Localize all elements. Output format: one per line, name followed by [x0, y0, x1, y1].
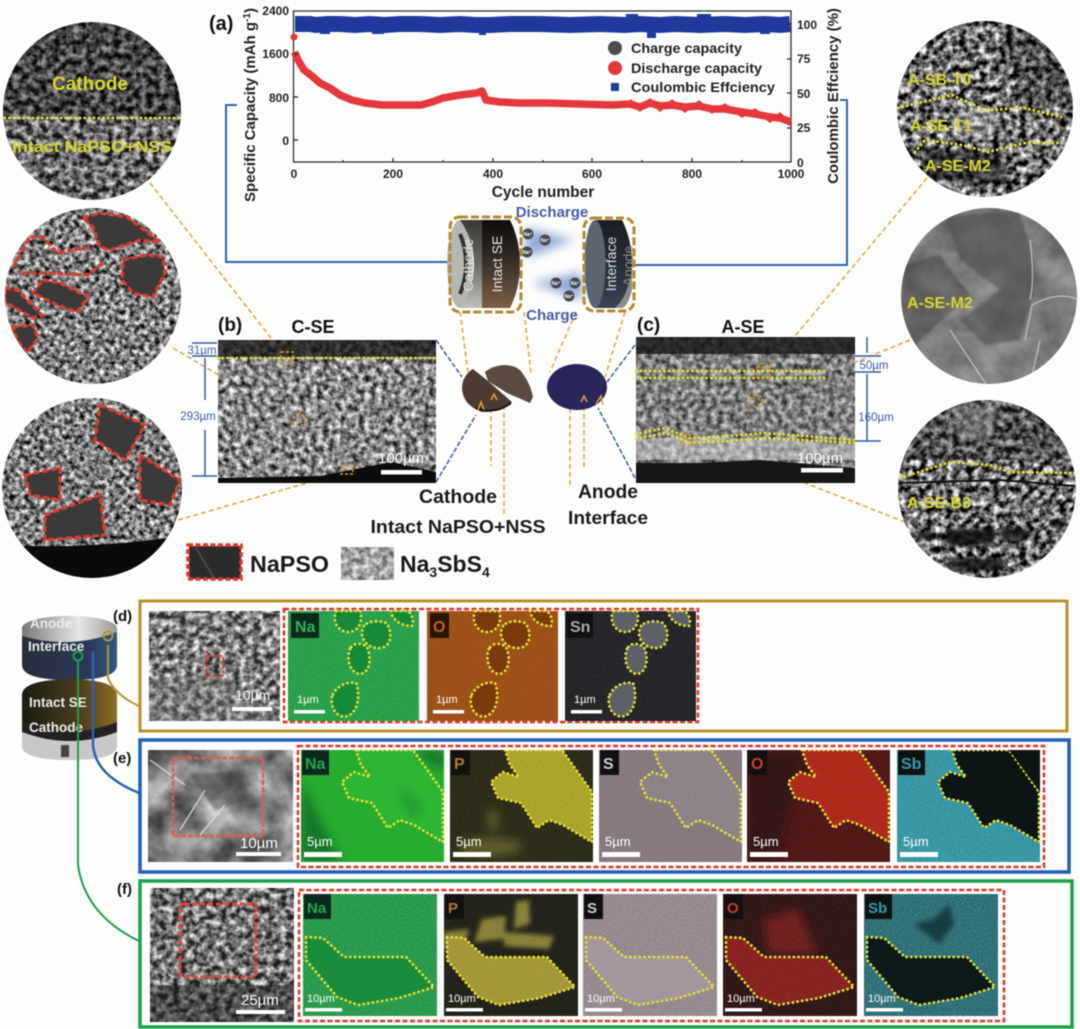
labels: Cathode	[52, 74, 128, 95]
map: Sb e	[897, 750, 1040, 862]
cell layer labels: Intact SE	[489, 236, 505, 292]
circle: anode interface layers	[895, 15, 1080, 205]
bottom axis ticks: 0	[291, 167, 298, 181]
chart legend	[608, 40, 775, 95]
map: P e: 5µm	[456, 834, 482, 849]
thickness markers b: 293µm	[180, 411, 216, 423]
red dashed outlines	[5, 213, 165, 353]
dark grains	[5, 213, 165, 353]
swatch: Na3SbS4	[341, 547, 394, 580]
coulombic efficiency series	[295, 14, 790, 38]
red dashed outlines	[25, 405, 180, 540]
dotted cathode boundary	[218, 357, 436, 359]
cell stack schematic	[22, 616, 117, 760]
disc labels: Cathode	[419, 487, 497, 508]
disc labels: Interface	[568, 508, 648, 528]
legend: NaPSO and Na3SbS4	[188, 545, 490, 580]
EDS map dashed frame d	[284, 609, 698, 722]
right axis ticks: 50	[797, 87, 811, 101]
left axis ticks: 2400	[262, 4, 289, 18]
interface layer	[22, 632, 117, 680]
thickness markers c: 50µm	[860, 360, 888, 372]
axis titles: Coulombic Effciency (%)	[825, 8, 842, 184]
circle: cathode zoom	[0, 20, 190, 205]
panel tag c and title: A-SE	[721, 317, 765, 337]
thickness markers c: 160µm	[858, 412, 894, 424]
scale bar: 100µm	[797, 450, 843, 467]
bottom axis ticks: 200	[383, 167, 403, 181]
labels	[12, 74, 172, 156]
disc labels: Intact NaPSO+NSS	[370, 516, 546, 537]
intact SE layer	[22, 679, 117, 735]
map: O e: 5µm	[753, 834, 779, 849]
labels: Intact NaPSO+NSS	[12, 139, 172, 156]
black underside	[22, 538, 168, 579]
map: S f	[583, 894, 717, 1016]
map: O f: 10µm	[727, 993, 755, 1005]
map: S e: S	[603, 756, 614, 773]
map: Sn d: Sn	[570, 619, 590, 636]
map: Na f: Na	[307, 900, 327, 917]
panel tags d e f: (d)	[113, 608, 132, 625]
map: O d	[427, 611, 558, 721]
cathode side cell	[447, 217, 521, 312]
stack labels: Cathode	[29, 720, 83, 735]
left axis ticks: 1600	[262, 47, 289, 61]
map: Na d	[288, 611, 419, 721]
map: Sb e: Sb	[901, 756, 922, 773]
sodium ions: Na⁺	[540, 238, 550, 244]
scale bar: 100µm	[378, 450, 424, 467]
map: Na d: 1µm	[297, 694, 319, 706]
SEM image f: 25µm	[241, 992, 279, 1009]
panel tag b and title: C-SE	[291, 317, 335, 337]
label: Na3SbS4: Na	[400, 551, 429, 577]
map: S f: 10µm	[587, 993, 615, 1005]
ion flow diagram	[516, 204, 588, 324]
cathode base	[22, 722, 117, 760]
scale bar	[378, 450, 424, 474]
map: P f: P	[448, 900, 458, 917]
axis titles	[242, 8, 842, 202]
chart legend: Discharge capacity	[631, 60, 762, 76]
thickness markers b: 31µm	[188, 345, 216, 357]
axis titles: -1	[242, 13, 253, 22]
label: NaPSO: NaPSO	[250, 551, 329, 577]
right axis ticks	[797, 18, 817, 170]
map: Sn d	[565, 611, 696, 721]
layer labels: A-SB-T0	[908, 72, 971, 89]
interface and anode labels: Anode	[620, 246, 636, 286]
dotted SE layers	[636, 371, 855, 443]
connector curves to panels d, e, f	[74, 632, 139, 941]
right axis ticks: 75	[797, 52, 811, 66]
interface and anode labels	[603, 237, 636, 291]
map: Na e	[301, 750, 444, 862]
bottom axis ticks: 800	[682, 167, 702, 181]
circle: fibers with NaPSO regions	[4, 207, 182, 384]
map: Na f	[303, 894, 437, 1016]
sodium ions: Na⁺	[564, 294, 574, 300]
sodium ions	[522, 228, 580, 302]
interface and anode labels: Interface	[603, 237, 619, 291]
SEM image d	[149, 611, 280, 721]
map: P e	[450, 750, 593, 862]
sample spots	[683, 367, 770, 444]
panel tags d e f: (e)	[113, 750, 131, 767]
chart legend: Coulombic Effciency	[631, 79, 775, 95]
map: O f	[723, 894, 859, 1016]
left axis ticks: 800	[269, 91, 289, 105]
sodium ions: Na⁺	[570, 281, 580, 287]
SEM image e: 10µm	[240, 835, 278, 852]
map: Na f: 10µm	[307, 993, 335, 1005]
label: Na3SbS4: SbS	[437, 551, 482, 577]
dark grains	[25, 405, 180, 540]
panel tag a: (a)	[209, 13, 233, 35]
panel d frame	[140, 601, 1067, 731]
circle: A-SE-B3	[895, 395, 1080, 585]
panel tag c and title	[637, 315, 765, 337]
boundary	[0, 117, 190, 119]
map: O e	[747, 750, 890, 862]
dashed links between discs and micrographs	[436, 340, 635, 482]
map: O d: O	[433, 619, 445, 636]
SEM image f	[150, 888, 294, 1022]
bottom axis ticks: 600	[582, 167, 602, 181]
label: Na3SbS4: 4	[482, 564, 490, 580]
right axis ticks: 100	[797, 18, 817, 32]
layer labels: A-SE-T1	[910, 118, 972, 135]
map: Sb f: Sb	[868, 900, 887, 917]
sodium ions: Na⁺	[551, 281, 561, 287]
layer boundaries	[898, 95, 1065, 152]
map: Na e: Na	[305, 756, 326, 773]
sodium ions: Na⁺	[522, 250, 532, 256]
circle: A-SE-M2	[895, 205, 1080, 390]
panel c: A-SE micrograph	[636, 337, 855, 483]
layer labels: A-SE-M2	[925, 158, 991, 175]
chart legend: Charge capacity	[631, 40, 742, 56]
bottom axis ticks: 1000	[778, 167, 805, 181]
cell layer labels	[460, 236, 505, 292]
swatch: NaPSO	[188, 545, 241, 579]
map: Sb f: 10µm	[868, 993, 896, 1005]
EDS map dashed frame f	[299, 890, 1004, 1021]
label: A-SE-M2	[907, 295, 973, 312]
panel tags d e f	[113, 608, 132, 898]
left axis ticks	[262, 4, 289, 148]
stack labels	[28, 616, 87, 735]
map: Sn d: 1µm	[574, 694, 596, 706]
map: P f	[444, 894, 578, 1016]
thickness markers c	[855, 337, 894, 441]
EDS map dashed frame e	[298, 746, 1044, 867]
anode side cell	[584, 218, 636, 311]
connector lines from circles to micrographs	[150, 178, 927, 522]
stack labels: Anode	[30, 616, 72, 631]
sample spots	[281, 352, 353, 474]
panel tags d e f: (f)	[117, 881, 132, 898]
blue bracket lines to cell	[226, 100, 847, 265]
stack labels: Interface	[28, 639, 85, 654]
panel e frame	[140, 740, 1069, 872]
discharge capacity series	[294, 52, 791, 122]
sodium ions: Na⁺	[523, 232, 533, 238]
left axis ticks: 0	[282, 134, 289, 148]
map: S e	[599, 750, 742, 862]
cell layer labels: Cathode	[460, 238, 476, 291]
panel b: C-SE micrograph	[218, 340, 436, 483]
map: S e: 5µm	[605, 834, 631, 849]
charge label: Charge	[526, 307, 578, 324]
photo: anode disc	[547, 364, 607, 410]
map: S f: S	[587, 900, 597, 917]
map: O d: 1µm	[436, 694, 458, 706]
panel a: cycling chart	[242, 4, 842, 202]
axis titles: Cycle number	[492, 184, 594, 201]
map: P e: P	[454, 756, 465, 773]
SEM image d: 10µm	[235, 687, 270, 703]
photo: cathode disc	[462, 365, 533, 412]
bottom axis ticks	[291, 167, 805, 181]
label: A-SE-B3	[907, 495, 971, 512]
map: O e: O	[751, 756, 763, 773]
disc labels: Anode	[578, 482, 638, 503]
ion clouds	[526, 228, 582, 300]
panel f frame	[140, 881, 1072, 1027]
map: Sb f	[864, 894, 1000, 1016]
map: Na d: Na	[295, 619, 316, 636]
anode top	[22, 616, 117, 650]
plot area	[294, 11, 791, 162]
panel tag b and title: (b)	[218, 315, 242, 336]
stack labels: Intact SE	[29, 695, 87, 710]
map: Na e: 5µm	[307, 834, 333, 849]
circle: fibers lower region	[0, 395, 190, 585]
right axis ticks: 0	[797, 156, 804, 170]
bottom axis ticks: 400	[483, 167, 503, 181]
map: P f: 10µm	[448, 993, 476, 1005]
panel tag b and title	[218, 315, 335, 337]
dotted boundary	[900, 462, 1075, 478]
axis titles: Specific Capacity (mAh g	[242, 22, 259, 202]
disc pointer arrows	[478, 394, 603, 410]
thickness markers b	[180, 343, 217, 476]
axis titles: )	[242, 8, 259, 13]
right axis ticks: 25	[797, 121, 811, 135]
disc labels	[370, 482, 648, 537]
map: Sb e: 5µm	[903, 834, 929, 849]
discharge label: Discharge	[516, 204, 588, 221]
panel tag c and title: (c)	[637, 315, 660, 336]
label: Na3SbS4: 3	[429, 564, 437, 580]
map: O f: O	[727, 900, 739, 917]
layer labels	[908, 72, 991, 175]
SEM image e	[148, 750, 293, 862]
